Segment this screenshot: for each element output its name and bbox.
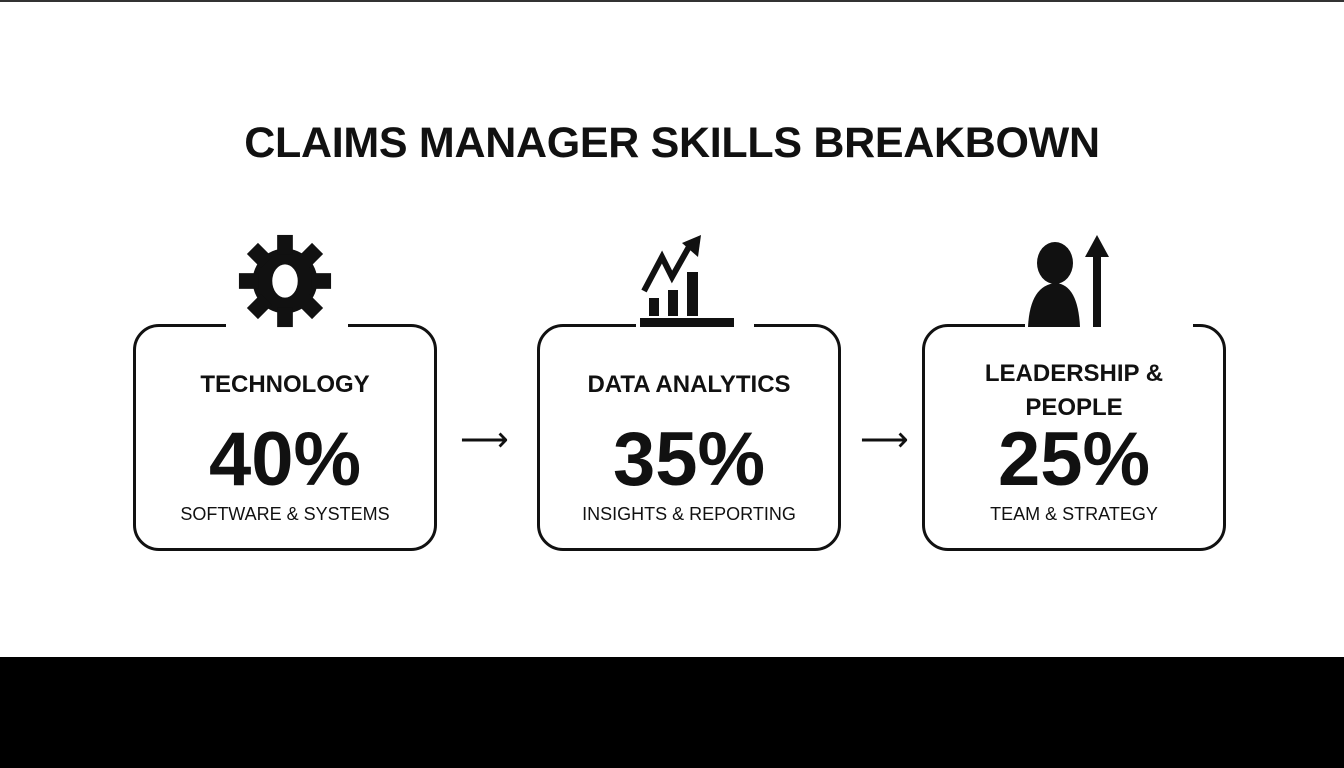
heading: leadership: [985, 360, 1163, 421]
percent 40: 40%: [209, 417, 361, 502]
icon: person with arrow: [1028, 235, 1109, 327]
arrow 2: ⟶: [860, 421, 909, 459]
icon: chart: [640, 235, 734, 327]
heading: technology: TECHNOLOGY: [200, 371, 370, 398]
heading: data analytics: DATA ANALYTICS: [587, 371, 791, 398]
percent 25: 25%: [998, 417, 1150, 502]
heading: leadership: LEADERSHIP &: [985, 360, 1163, 387]
top line: [0, 0, 1344, 2]
icon: gear: [238, 234, 332, 328]
subtitle: TEAM & STRATEGY: [990, 504, 1158, 524]
heading: leadership: PEOPLE: [1025, 394, 1123, 421]
panel: technology: [133, 324, 437, 551]
subtitle: INSIGHTS & REPORTING: [582, 504, 796, 524]
panel: data analytics: [537, 324, 841, 551]
percent 35: 35%: [613, 417, 765, 502]
arrow 1: ⟶: [460, 421, 509, 459]
bottom black bar: [0, 657, 1344, 768]
panel: leadership: [922, 324, 1226, 551]
subtitle: SOFTWARE & SYSTEMS: [180, 504, 390, 524]
title: CLAIMS MANAGER SKILLS BREAKBOWN: [244, 119, 1100, 167]
